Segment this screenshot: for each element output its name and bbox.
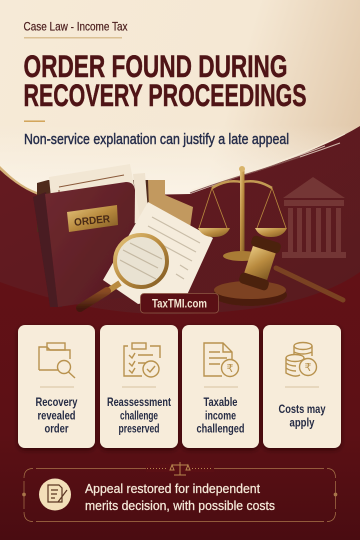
brand badge: TaxTMI.com: [152, 298, 207, 310]
front sheet: [103, 202, 213, 304]
panel: taxable income challenged: [182, 325, 259, 448]
background: maroon swoosh: [0, 125, 360, 540]
book spine: [33, 192, 62, 307]
illustration: gavel: [213, 235, 343, 306]
paper sheet behind book: [49, 164, 141, 240]
divider: [285, 386, 319, 388]
banner frame: [22, 468, 337, 522]
banner text: [85, 481, 275, 513]
subtitle: Non-service explanation can justify a late appeal: [24, 132, 289, 148]
illustration: case file and magnifier: [33, 164, 213, 308]
banner text: Appeal restored for independent: [85, 481, 260, 496]
label: Costs may: [278, 402, 326, 416]
icon: document with rupee: ₹: [226, 363, 234, 375]
icon: document with pen: [39, 478, 71, 510]
eyebrow: case law label: Case Law - Income Tax: [24, 20, 128, 34]
brand badge: [140, 294, 218, 313]
folder back: [37, 180, 165, 232]
magnifier lens: [115, 235, 167, 287]
title: [24, 48, 306, 113]
head: [238, 235, 282, 291]
dotted accents: [147, 468, 213, 470]
accent dash: [24, 120, 45, 122]
panel: costs may apply: [263, 325, 341, 448]
label: challenged: [196, 422, 244, 436]
icon: checklist clipboard: [124, 343, 160, 377]
icon: folder with magnifier: [39, 343, 75, 378]
handle: [276, 268, 343, 300]
book cover: [45, 182, 135, 307]
banner: conclusion: [22, 462, 337, 522]
label: [278, 402, 326, 430]
manila folder: [148, 180, 193, 240]
divider: [40, 386, 74, 388]
illustration: balance scales: [198, 166, 287, 261]
order plate: [67, 205, 118, 232]
label: Reassessment: [107, 395, 171, 409]
label: [36, 395, 78, 436]
label: order: [44, 422, 69, 436]
scale backing: [146, 464, 214, 472]
divider: [204, 386, 238, 388]
magnifier handle: [80, 283, 120, 308]
order plate: ORDER: [74, 213, 111, 229]
label: challenge: [120, 408, 158, 422]
label: apply: [290, 416, 315, 430]
label: preserved: [118, 422, 160, 436]
label: Taxable: [204, 395, 238, 409]
label: Recovery: [36, 395, 78, 409]
eyebrow: case law label: [24, 20, 128, 38]
panel: recovery revealed order: [18, 325, 95, 448]
label: revealed: [38, 408, 76, 422]
label: [107, 395, 171, 436]
banner text: merits decision, with possible costs: [85, 498, 275, 513]
illustration: courthouse silhouette: [282, 177, 346, 258]
sound block: [213, 281, 287, 306]
panel: reassessment challenge preserved: [100, 325, 178, 448]
paper behind book: [133, 173, 148, 222]
label: income: [205, 408, 236, 422]
icon: coins with rupee: ₹: [304, 362, 312, 374]
label: [196, 395, 244, 436]
divider: [122, 386, 156, 388]
icon: small scales: [170, 462, 190, 475]
